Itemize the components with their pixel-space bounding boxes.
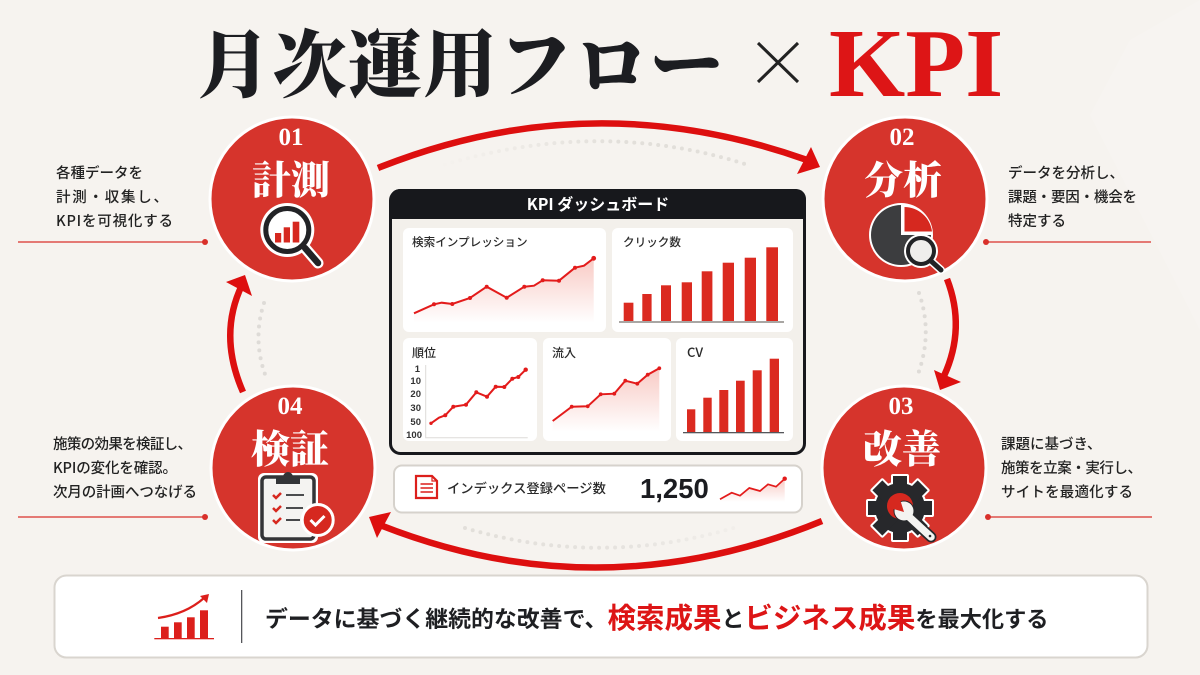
step 01 description: 各種データを bbox=[56, 162, 143, 183]
panel: 順位: 順位 bbox=[412, 344, 436, 361]
KPI dashboard: KPI ダッシュボード bbox=[527, 191, 669, 215]
icon: gear and wrench bbox=[868, 476, 932, 540]
message text: ビジネス成果 bbox=[744, 596, 915, 637]
step 02 description: データを分析し、 bbox=[1008, 162, 1124, 183]
icon: clipboard checklist bbox=[258, 472, 333, 543]
step 02 circle: 分析 bbox=[864, 150, 942, 206]
panel: 流入: 流入 bbox=[552, 344, 576, 361]
panel: 順位 bbox=[403, 338, 537, 441]
step 04 circle bbox=[211, 386, 375, 550]
panel: 順位: 50 bbox=[410, 417, 421, 428]
panel: 検索インプレッション: 検索インプレッション bbox=[412, 234, 528, 250]
step 01 description: KPIを可視化する bbox=[56, 210, 173, 231]
step 03 circle: 03 bbox=[888, 393, 914, 420]
message text: 検索成果 bbox=[607, 596, 721, 637]
panel: 順位: 20 bbox=[410, 389, 421, 400]
multiplication sign bbox=[758, 43, 798, 82]
step 04 description: KPIの変化を確認。 bbox=[53, 457, 177, 478]
step 02 circle bbox=[823, 117, 987, 281]
panel: クリック数 bbox=[612, 228, 793, 332]
panel: 流入 bbox=[543, 338, 671, 441]
arrow: 計測 to 分析 bbox=[378, 123, 820, 174]
step 02 description: 特定する bbox=[1008, 210, 1066, 231]
panel: 検索インプレッション bbox=[403, 228, 606, 332]
step 04 description bbox=[18, 433, 208, 520]
title: 月次運用フロー bbox=[197, 7, 725, 113]
step 04 circle: 04 bbox=[278, 393, 303, 420]
step 04 description: 次月の計画へつなげる bbox=[53, 481, 197, 502]
index registration counter: インデックス登録ページ数 bbox=[447, 478, 606, 497]
title bbox=[197, 7, 1003, 118]
message text: を最大化する bbox=[915, 602, 1048, 634]
step 01 description: 計測・収集し、 bbox=[56, 186, 168, 207]
step 02 description bbox=[983, 162, 1151, 245]
step 01 description bbox=[18, 162, 208, 245]
icon: document bbox=[416, 476, 437, 498]
panel: クリック数: クリック数 bbox=[623, 234, 681, 250]
title: KPI bbox=[829, 10, 1003, 118]
step 03 description: サイトを最適化する bbox=[1001, 481, 1133, 502]
step 03 description: 課題に基づき、 bbox=[1001, 433, 1101, 454]
step 01 circle: 01 bbox=[278, 124, 304, 151]
step 03 description: 施策を立案・実行し、 bbox=[1001, 457, 1142, 478]
icon: magnifier with bars bbox=[260, 203, 318, 263]
panel: CV: CV bbox=[687, 342, 703, 361]
step 01 circle bbox=[210, 117, 374, 281]
icon: rising bar chart bbox=[154, 594, 214, 639]
index registration counter bbox=[394, 466, 802, 512]
step 03 circle bbox=[822, 386, 986, 550]
step 01 circle: 計測 bbox=[252, 150, 330, 206]
message text: と bbox=[721, 600, 744, 634]
panel: 順位: 10 bbox=[410, 376, 421, 387]
panel: 順位: 1 bbox=[415, 364, 421, 375]
index registration counter: 1,250 bbox=[640, 473, 709, 504]
arrow: 改善 to 検証 bbox=[369, 512, 822, 568]
panel: 順位: 30 bbox=[410, 403, 421, 414]
panel: CV bbox=[676, 338, 793, 441]
step 03 description bbox=[985, 433, 1152, 520]
dotted guide ring bbox=[258, 141, 926, 548]
panel: 順位: 100 bbox=[406, 430, 422, 441]
sparkline bbox=[720, 476, 787, 502]
arrow: 分析 to 改善 bbox=[934, 279, 961, 390]
KPI dashboard bbox=[390, 189, 806, 454]
message text: データに基づく継続的な改善で、 bbox=[265, 600, 607, 634]
step 04 circle: 検証 bbox=[251, 419, 329, 475]
step 02 description: 課題・要因・機会を bbox=[1008, 186, 1137, 207]
arrow: 検証 to 計測 bbox=[226, 275, 252, 392]
bottom message bar bbox=[54, 576, 1148, 658]
step 04 description: 施策の効果を検証し、 bbox=[53, 433, 192, 454]
step 02 circle: 02 bbox=[890, 124, 914, 151]
step 03 circle: 改善 bbox=[863, 419, 941, 475]
icon: pie chart with magnifier bbox=[869, 203, 941, 270]
